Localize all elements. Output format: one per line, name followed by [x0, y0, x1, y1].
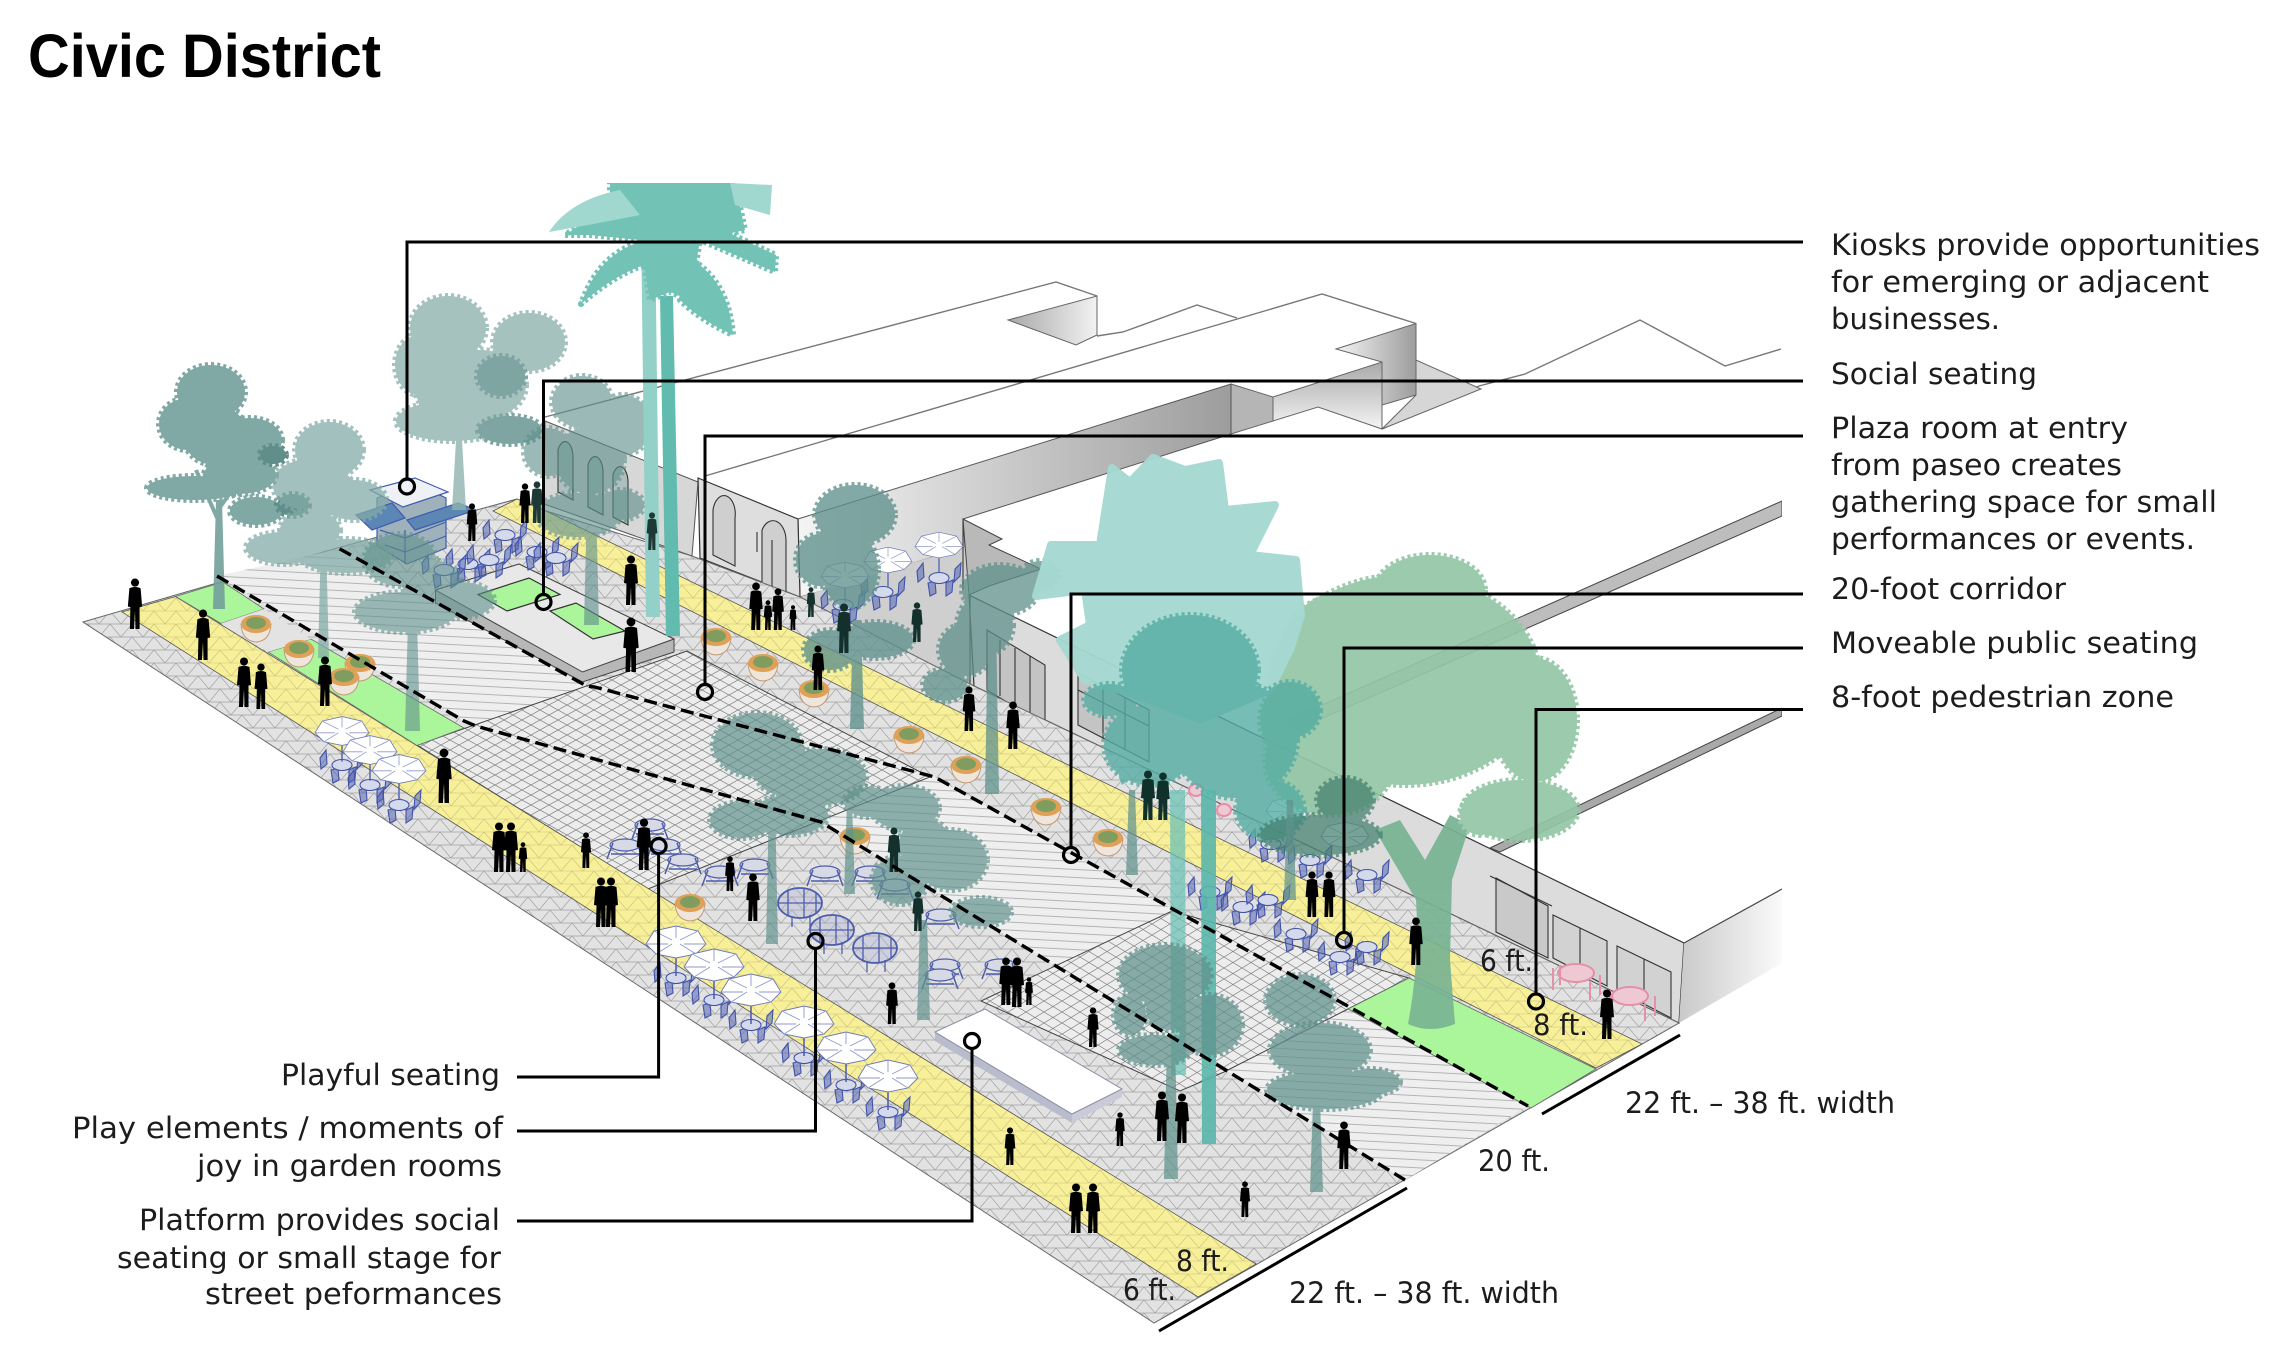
- callout: plaza room: performances or events.: [1831, 522, 2195, 556]
- tree: tall behind planter: [395, 296, 565, 510]
- corridor boundary dashed lines: [217, 549, 1528, 1180]
- callout: kiosks: for emerging or adjacent: [1831, 265, 2209, 299]
- callout: plaza room: from paseo creates: [1831, 448, 2122, 482]
- tree: courtyard dark canopy overlay: [1260, 778, 1380, 855]
- callout: social seating: Social seating: [1831, 357, 2037, 391]
- callout: platform: street peformances: [205, 1277, 502, 1311]
- tree: central teal: [1084, 615, 1320, 840]
- leader: moveable seating: [1336, 648, 1803, 948]
- tree: storefront: [923, 561, 1058, 794]
- ground trees: [710, 713, 1400, 1192]
- planter gap: [221, 609, 311, 652]
- recessed rooftop faces: [1008, 296, 1481, 434]
- callout: play elements: joy in garden rooms: [196, 1149, 502, 1183]
- courtyard ground: [800, 547, 974, 685]
- palm: centre trunks: [1170, 790, 1216, 1144]
- raised planter with seating: [436, 564, 674, 682]
- north pedestrian zone: [493, 499, 1642, 1068]
- tree: south lawn 1: [1114, 945, 1242, 1179]
- ground plane: [83, 499, 1679, 1323]
- pink cafe tables: [1189, 784, 1655, 1021]
- far west wall: [544, 421, 698, 556]
- tree: courtyard: [796, 485, 913, 729]
- dimension: north 8 ft: 8 ft.: [1533, 1008, 1588, 1042]
- callout: kiosks: Kiosks provide opportunities: [1831, 228, 2260, 262]
- callout: platform: seating or small stage for: [117, 1241, 501, 1275]
- palm: west: [549, 183, 776, 636]
- dimension: south 8 ft: 8 ft.: [1176, 1244, 1229, 1278]
- umbrellas: [315, 532, 1369, 1110]
- east gable wall: [1679, 889, 1782, 1023]
- callout: plaza room: gathering space for small: [1831, 485, 2217, 519]
- play seating and bears: [607, 819, 1018, 989]
- kiosk: [356, 478, 476, 564]
- crosshatch plaza room: [417, 651, 930, 889]
- leader: pedestrian zone: [1528, 710, 1803, 1009]
- leader: playful seating: [517, 838, 666, 1077]
- building massing: [544, 282, 1782, 1023]
- callout: pedestrian zone: 8-foot pedestrian zone: [1831, 680, 2174, 714]
- planting strips: [176, 582, 1596, 1108]
- dimension: south 6 ft: 6 ft.: [1123, 1273, 1176, 1307]
- tree: beside arch wall: [524, 376, 651, 625]
- stage platform: [935, 1009, 1122, 1123]
- hatch corridor: [217, 549, 1528, 1180]
- callout: platform: Platform provides social: [139, 1203, 500, 1237]
- crosshatch garden room: [981, 911, 1409, 1091]
- notch wall: [963, 519, 1041, 595]
- callout: play elements: Play elements / moments of: [72, 1111, 504, 1145]
- leader: platform: [517, 1034, 980, 1221]
- tree: north walk: [1126, 790, 1334, 1025]
- leader: 20-foot corridor: [1064, 594, 1803, 862]
- title: Civic District: [28, 22, 381, 90]
- tree: large green: [1260, 555, 1578, 1029]
- dimension: corridor width: 20 ft.: [1478, 1144, 1550, 1178]
- dimension: north width: 22 ft. – 38 ft. width: [1625, 1086, 1895, 1120]
- callout: corridor: 20-foot corridor: [1831, 572, 2066, 606]
- storefront wall: [969, 595, 1684, 1023]
- callout: moveable seating: Moveable public seating: [1831, 626, 2198, 660]
- arch block wall: [698, 478, 800, 597]
- isometric street diagram: [83, 183, 1782, 1323]
- leader: plaza room: [698, 436, 1803, 700]
- leader: kiosks: [400, 242, 1803, 494]
- leader: play elements: [517, 934, 823, 1131]
- tree: garden centre: [844, 786, 1011, 1020]
- callout: kiosks: businesses.: [1831, 302, 2000, 336]
- back trees: [147, 296, 1058, 794]
- callout: playful seating: Playful seating: [281, 1058, 500, 1092]
- dimension line: south: [1159, 1188, 1407, 1331]
- base paving: [83, 499, 1679, 1323]
- callout: plaza room: Plaza room at entry: [1831, 411, 2128, 445]
- leader: social seating: [536, 381, 1803, 610]
- far roof outline: [545, 282, 1781, 476]
- courtyard back wall: [798, 384, 1231, 597]
- tree: light behind kiosk: [246, 422, 392, 658]
- people silhouettes: [128, 481, 1614, 1233]
- tree: garden west: [710, 713, 866, 944]
- tree: west: [147, 365, 309, 609]
- tree: south lawn 2: [1267, 1023, 1400, 1192]
- dimension: north 6 ft: 6 ft.: [1480, 944, 1533, 978]
- palm: centre pale crown: [1036, 458, 1301, 720]
- dimension: south width: 22 ft. – 38 ft. width: [1289, 1276, 1559, 1310]
- roof parapet bands: [1286, 501, 1782, 729]
- tree: plaza shade: [355, 534, 494, 731]
- dimension line: north: [1542, 1035, 1680, 1114]
- openings and arches: [558, 442, 1671, 1018]
- outdoor table clusters: [320, 520, 1389, 1130]
- planters: [241, 615, 1123, 921]
- south pedestrian zone: [122, 596, 1256, 1297]
